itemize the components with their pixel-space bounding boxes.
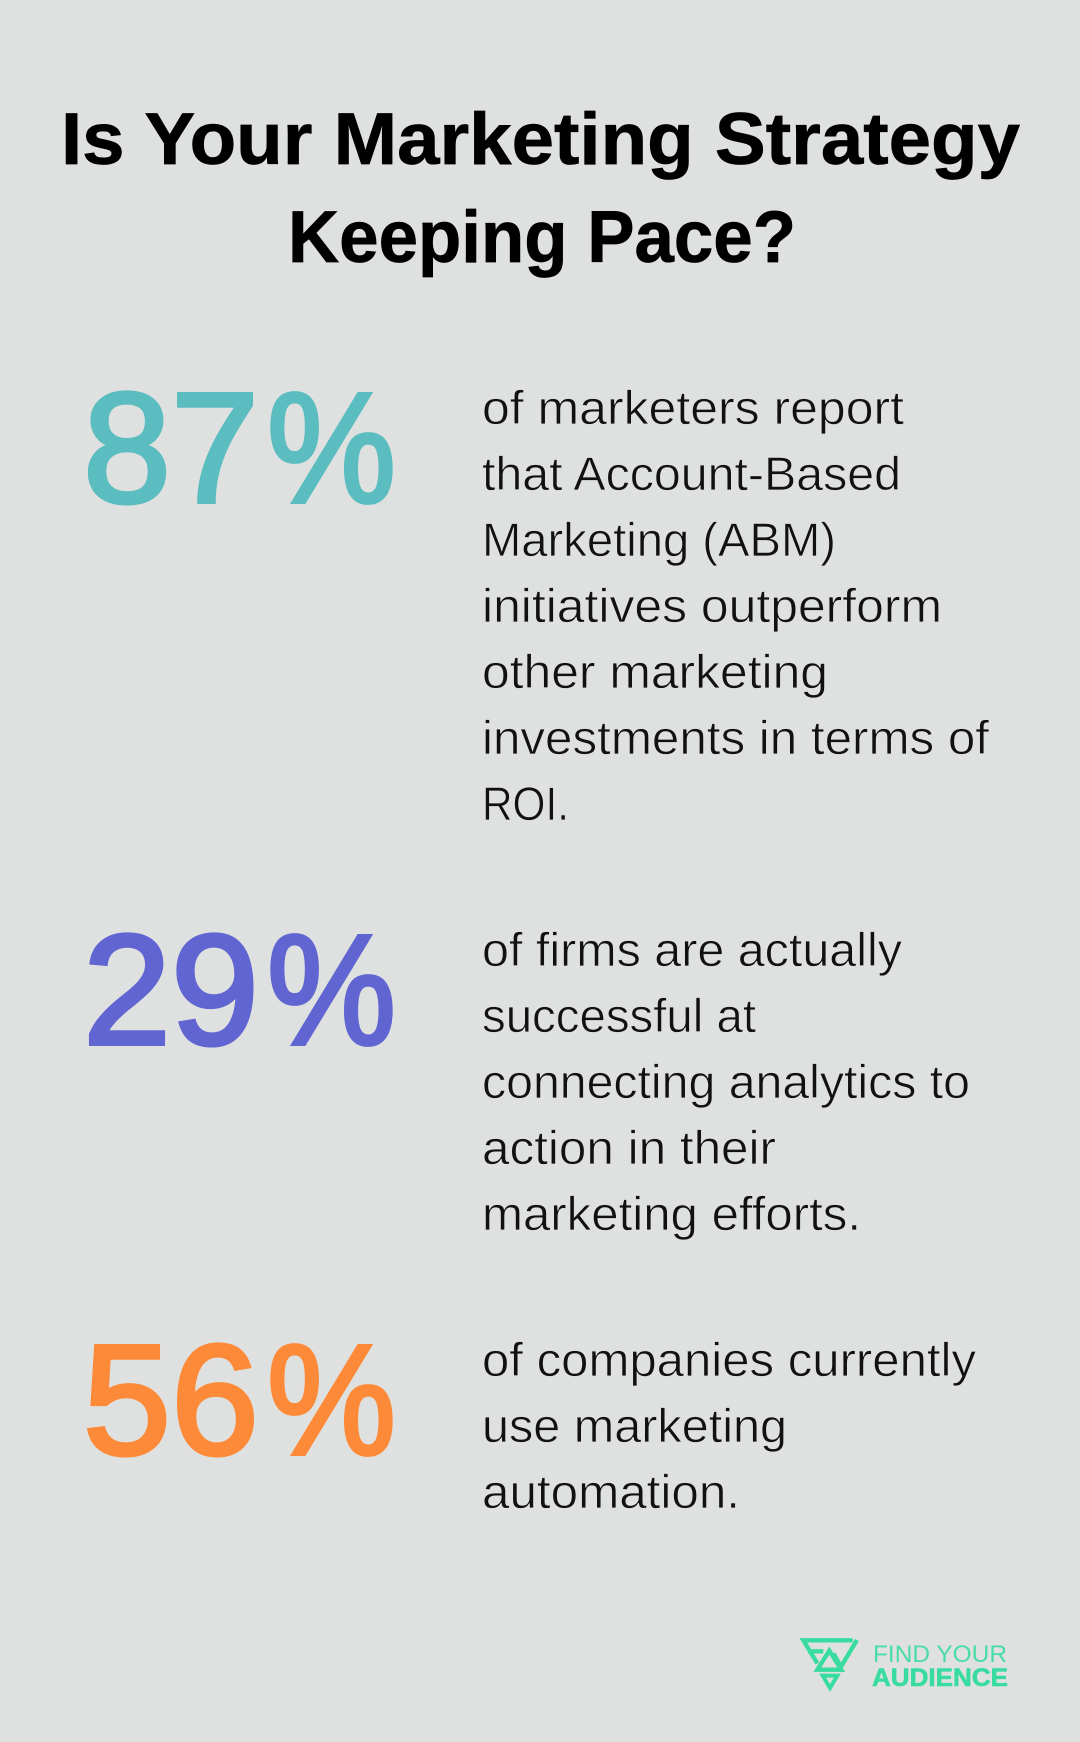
logo wordmark: AUDIENCE — [872, 1664, 1008, 1692]
stat description: ABM — [482, 382, 990, 831]
stat number: 87% — [83, 361, 396, 536]
stat number: 29%: 29 — [83, 903, 259, 1078]
stat description: ABM: Marketing (ABM) — [482, 514, 836, 567]
stat description: automation: automation. — [482, 1466, 740, 1519]
stat description: analytics: action in their — [482, 1122, 776, 1175]
stat description: analytics: of firms are actually — [482, 924, 902, 977]
stat description: ABM: initiatives outperform — [482, 580, 942, 633]
stat description: analytics: successful at — [482, 990, 756, 1043]
stat description: analytics: marketing efforts. — [482, 1188, 861, 1241]
stat description: ABM: ROI. — [482, 778, 569, 831]
stat: 56 percent — [83, 1313, 976, 1519]
stat number: 56%: 56 — [83, 1313, 259, 1488]
stat number: 29%: % — [267, 903, 396, 1078]
icon: triangles logo mark — [803, 1640, 857, 1688]
stat description: automation: of companies currently — [482, 1334, 976, 1387]
stat number: 87%: % — [267, 361, 396, 536]
title: Keeping Pace? — [288, 197, 796, 278]
stat description: ABM: investments in terms of — [482, 712, 990, 765]
stat description: ABM: that Account-Based — [482, 448, 901, 501]
stat description: automation: use marketing — [482, 1400, 787, 1453]
stat: 87 percent — [83, 361, 990, 831]
logo wordmark — [872, 1641, 1008, 1692]
stat description: ABM: of marketers report — [482, 382, 904, 435]
title — [61, 99, 1020, 278]
logo: Find Your Audience — [803, 1640, 1008, 1692]
stat number: 56%: % — [267, 1313, 396, 1488]
stat description: analytics — [482, 924, 970, 1241]
stat number: 87%: 87 — [83, 361, 259, 536]
stat description: analytics: connecting analytics to — [482, 1056, 970, 1109]
stat description: automation — [482, 1334, 976, 1519]
title: Is Your Marketing Strategy — [61, 99, 1020, 180]
stat: 29 percent — [83, 903, 970, 1241]
stat description: ABM: other marketing — [482, 646, 828, 699]
stat number: 56% — [83, 1313, 396, 1488]
stat number: 29% — [83, 903, 396, 1078]
logo wordmark: FIND YOUR — [873, 1641, 1007, 1668]
